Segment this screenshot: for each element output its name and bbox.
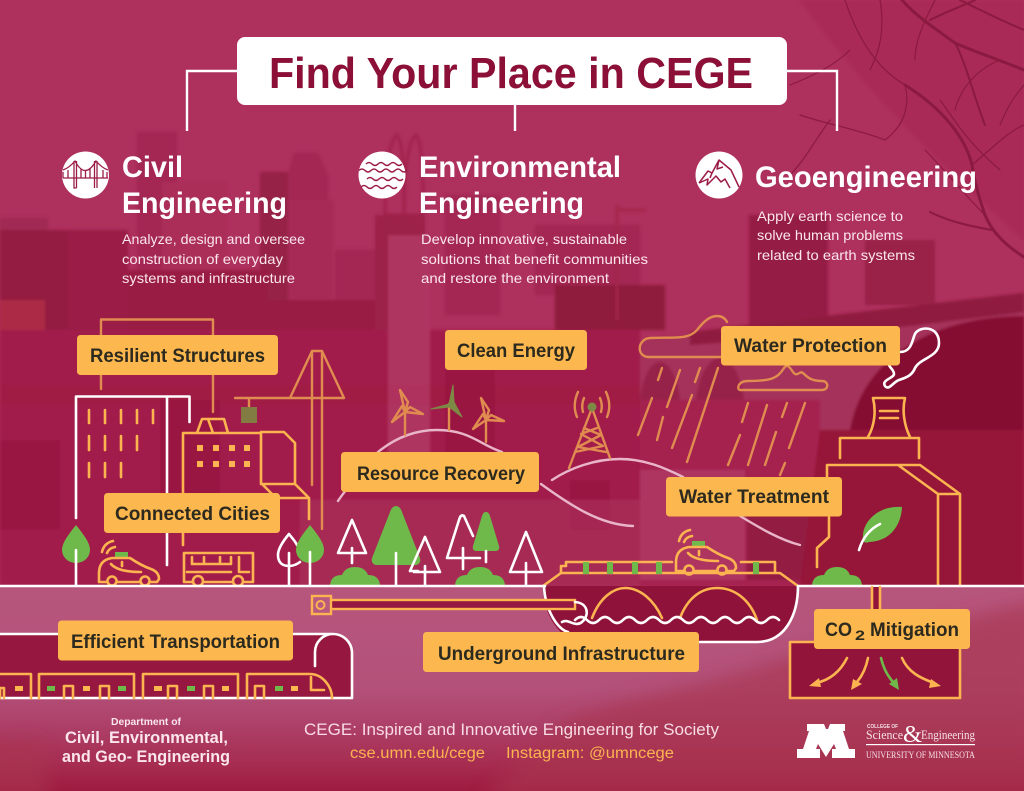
column: geoengineering [696,152,977,263]
label: CO2 mitigation [814,609,970,649]
illustration: underground tunnel and train [0,634,352,698]
label: underground infrastructure [423,632,699,672]
bridge deck [543,562,798,586]
label: water protection [721,326,900,366]
description: geoengineering: Apply earth science to [757,208,903,224]
footer: web and social links: cse.umn.edu/cege [350,745,485,762]
description: environmental [421,231,648,286]
footer: university logo: COLLEGE OF [867,724,898,730]
title banner [237,37,787,105]
heading: civil engineering: Civil [122,151,183,184]
label: CO2 mitigation: 2 [855,627,865,643]
arches [592,588,757,620]
arrows [816,658,934,683]
illustration: CO2 storage [790,587,960,698]
label: efficient transportation [58,620,293,660]
label: underground infrastructure: Underground Infrastructure [438,644,685,665]
description: civil [122,231,305,286]
label: connected cities: Connected Cities [115,504,270,525]
illustration: river bridge [543,562,798,642]
label: CO2 mitigation: CO [825,620,852,641]
footer: web and social links: Instagram: @umncege [506,745,674,762]
label: clean energy [445,330,587,370]
illustration: bus [184,553,253,586]
bushes [330,567,380,585]
illustration: construction crane [101,320,344,529]
illustration: white trees and bushes [330,506,862,585]
description: geoengineering [757,208,915,263]
footer: tagline: CEGE: Inspired and Innovative Engineering for Society [304,721,720,739]
building windows [197,445,250,467]
footer: department name: Department of [111,717,182,728]
description: environmental: solutions that benefit communities [421,251,648,267]
ground band [0,586,1024,791]
photo background: sky [0,0,1024,586]
construction crane [617,205,645,320]
column: civil engineering [62,151,305,286]
heading: geoengineering: Geoengineering [755,161,977,194]
title connector lines [187,71,837,131]
label: connected cities [104,493,280,533]
illustration: civil buildings [76,396,309,565]
bridge deck and arches [640,293,1024,430]
footer: university logo [797,722,976,760]
white office tower [76,396,190,565]
water wave [575,617,779,623]
label: water treatment: Water Treatment [679,487,830,508]
footer: university logo: & [903,722,922,748]
leaf [859,507,902,550]
label: resilient structures: Resilient Structures [90,346,265,367]
description: geoengineering: solve human problems [757,227,903,243]
train cars [0,674,332,698]
label: water protection: Water Protection [734,336,887,357]
far towers [137,132,640,330]
footer: web and social links [350,745,674,762]
label: clean energy: Clean Energy [457,341,575,362]
block M [797,724,855,758]
description: geoengineering: related to earth systems [757,247,915,263]
smoke [884,329,939,387]
column: environmental engineering [358,151,648,286]
footer foliage tint [0,600,1024,791]
footer: department name: and Geo- Engineering [62,748,230,766]
tower windows [89,410,153,477]
icon: mountain [696,152,742,198]
photo background: city skyline [0,0,1024,586]
label: resource recovery: Resource Recovery [357,464,525,485]
illustration: connected car [99,541,159,586]
description: civil: systems and infrastructure [122,270,295,286]
orange building [183,419,309,545]
illustration: underground pipe [0,586,1024,624]
footer: university logo: Science [866,728,903,742]
description: civil: Analyze, design and oversee [122,231,305,247]
illustration: storm clouds and rain [638,316,827,475]
footer: university logo: Engineering [921,728,976,742]
footer: university logo: UNIVERSITY OF MINNESOTA [866,750,975,760]
illustration: left trees [62,525,324,585]
tree canopy tint [800,0,1024,240]
footer: department name [62,717,230,766]
illustration: car on bridge [676,530,736,574]
column: civil engineering: Engineering [122,187,287,220]
description: environmental: Develop innovative, sustainable [421,231,627,247]
description: civil: construction of everyday [122,251,283,267]
label: water treatment [666,477,842,516]
title banner: Find Your Place in CEGE [269,49,753,98]
footer: department name: Civil, Environmental, [65,729,228,747]
label: CO2 mitigation: Mitigation [870,620,959,641]
description: environmental: and restore the environment [421,270,609,286]
lower horizon and water [0,330,640,586]
bridge posts [583,562,759,574]
label: efficient transportation: Efficient Transportation [71,632,280,653]
stone pillars [388,235,430,455]
icon: water waves [358,152,407,198]
red brick building [0,300,45,390]
photo background: bare tree branches [790,0,1024,257]
illustration: radio tower [569,392,610,468]
label: resource recovery [341,452,539,492]
column: environmental engineering: Engineering [419,187,584,220]
illustration: smokestack plant [817,329,960,585]
illustration: hills [338,430,800,545]
illustration: wind turbines [392,385,504,442]
label: resilient structures [77,335,278,375]
city reflections [0,370,610,530]
heading: environmental engineering: Environmental [419,151,621,184]
icon: bridge [62,152,109,198]
foliage [800,430,1024,586]
